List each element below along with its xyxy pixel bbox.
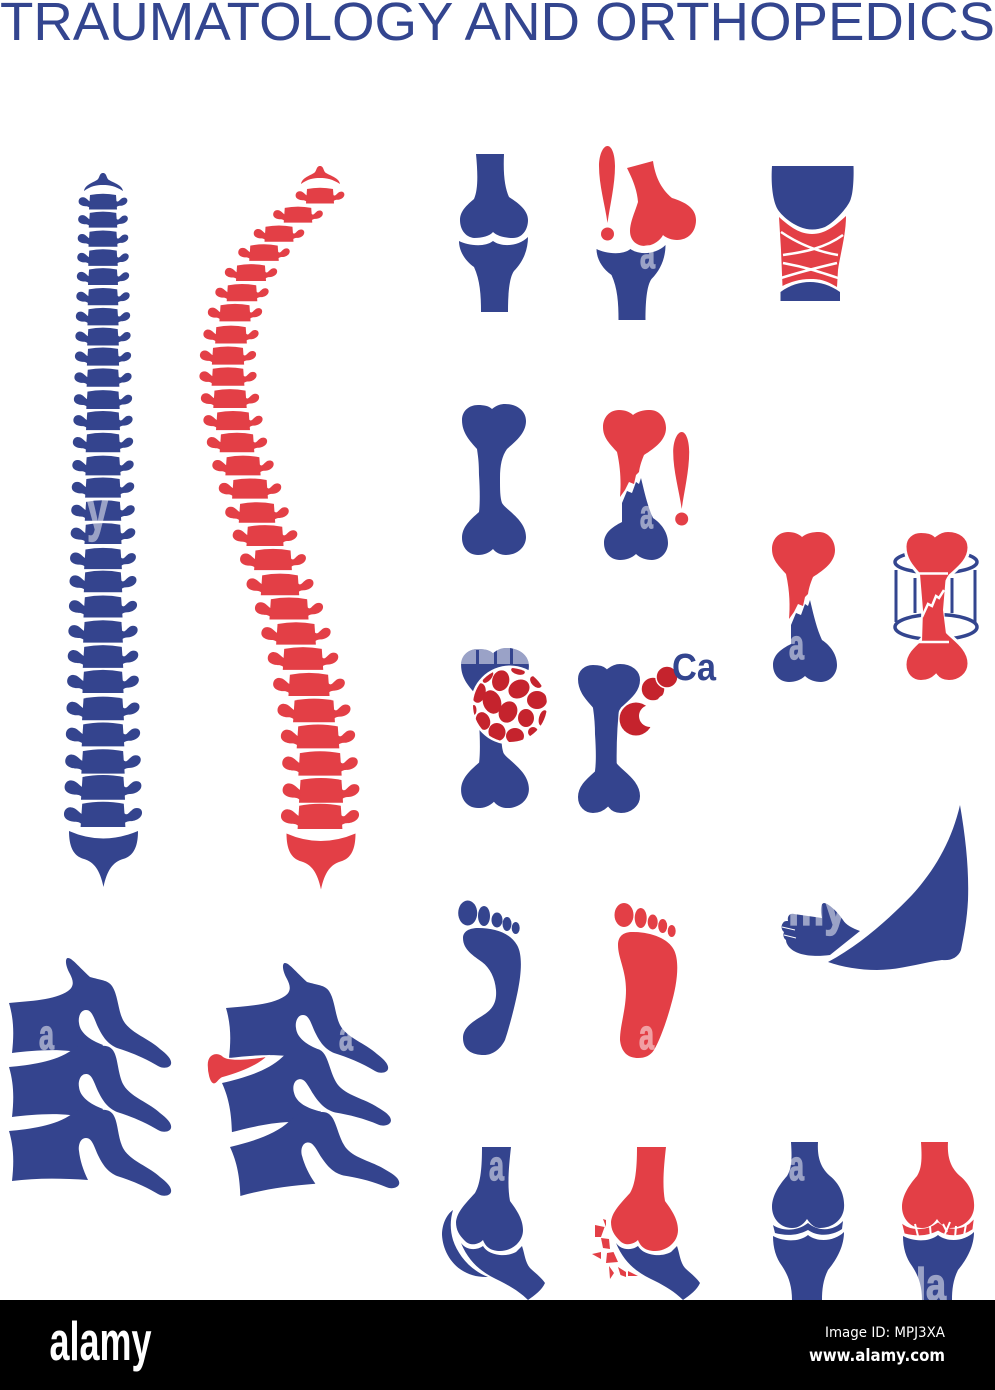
footer bar	[0, 1300, 995, 1390]
icon: healthy joint with cartilage	[772, 1142, 844, 1300]
icon: joint with shattered kneecap	[592, 1147, 700, 1300]
icon: osteoporosis bone with magnified bone tissue	[461, 648, 547, 808]
icon: bandaged joint	[772, 166, 854, 301]
icon: arm stump with hand	[782, 805, 968, 970]
icon: arm stump with hand: my	[788, 880, 847, 936]
icon: healthy bone	[462, 404, 526, 555]
healthy spine (blue): y	[87, 479, 108, 542]
icon: arthritic joint with damaged cartilage	[902, 1142, 974, 1310]
vertebrae side view with herniated disc	[207, 963, 400, 1211]
icon: healthy knee joint	[459, 154, 528, 312]
icon: fractured bone: a	[789, 621, 804, 668]
icon: joint with kneecap: a	[489, 1142, 504, 1189]
icon: fractured bone	[772, 532, 837, 682]
icon: fractured bone with exclamation	[603, 410, 689, 560]
icon: normal foot	[458, 900, 521, 1055]
scoliotic spine (red)	[199, 166, 359, 890]
label: calcium: Ca	[672, 647, 717, 689]
icon: dislocated knee with exclamation	[596, 146, 696, 320]
icon: dislocated knee with exclamation: a	[640, 230, 655, 277]
icon: fractured bone with exclamation: a	[640, 493, 653, 537]
icon: external fixator on fractured bone	[895, 530, 977, 682]
healthy vertebrae side view	[9, 958, 171, 1196]
healthy spine (blue)	[64, 173, 142, 887]
icon: flat foot: a	[639, 1011, 654, 1058]
icon: arthritic joint with damaged cartilage: la	[916, 1259, 947, 1310]
icon: bone losing calcium	[577, 647, 717, 814]
herniated disc	[207, 1053, 268, 1084]
icon: healthy joint with cartilage: a	[789, 1142, 804, 1189]
vertebrae side view with herniated disc: a	[339, 1012, 353, 1059]
icon: exclamation mark	[599, 146, 615, 240]
icon: exclamation mark	[673, 432, 689, 526]
website: www.alamy.com	[809, 1346, 945, 1366]
icon: joint with kneecap	[442, 1142, 545, 1300]
healthy vertebrae side view: a	[39, 1011, 54, 1058]
image id: Image ID: MPJ3XA	[825, 1325, 945, 1341]
footer logo: alamy	[50, 1310, 152, 1372]
icon: flat foot	[614, 903, 677, 1058]
